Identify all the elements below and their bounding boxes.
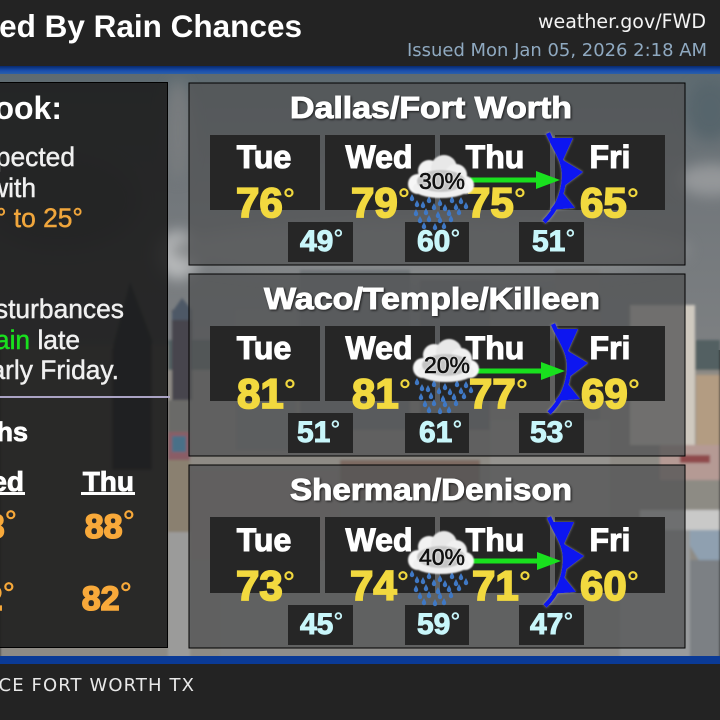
high temperatures: ° (514, 182, 526, 217)
day labels (237, 330, 630, 366)
low temperature boxes: 59 (417, 608, 450, 641)
panel: Waco/Temple/Killeen (189, 274, 685, 456)
front movement arrow (470, 552, 561, 570)
day labels: Wed (346, 139, 412, 175)
day labels: Tue (237, 330, 291, 366)
low temperature boxes: ° (450, 608, 460, 636)
panel: outlook (0, 82, 170, 648)
panel: Sherman/Denison (189, 465, 685, 648)
low temperature boxes: 45 (300, 608, 333, 641)
highs column: Thu (81, 466, 135, 618)
day labels: Wed (346, 330, 412, 366)
low temperature boxes: ° (333, 608, 343, 636)
low temperature boxes: 61 (419, 416, 452, 449)
icon: rain cloud 30% (408, 155, 474, 230)
highs column: Wed: ° (3, 576, 15, 611)
day labels: Thu (466, 522, 524, 558)
day labels (237, 522, 630, 558)
high temperatures: 73 (236, 562, 283, 609)
website link: weather.gov/FWD (538, 10, 706, 33)
high temperatures: 81 (237, 370, 284, 417)
day labels: Fri (590, 139, 630, 175)
low temperature boxes: 60 (417, 225, 450, 258)
highs column: Thu: 82 (82, 580, 120, 618)
high temperatures (236, 179, 639, 226)
day cards (210, 135, 665, 210)
day labels: Thu (466, 139, 524, 175)
day labels (237, 139, 630, 175)
day labels: Thu (466, 330, 524, 366)
highs column: Thu: Thu (83, 466, 134, 497)
high temperatures: ° (283, 182, 295, 217)
low temperature boxes: ° (333, 225, 343, 253)
high temperatures: 75 (467, 179, 514, 226)
cold front (544, 133, 583, 222)
high temperatures: 79 (351, 179, 398, 226)
low temperature boxes (288, 413, 584, 453)
low temperature boxes: 51 (532, 225, 565, 258)
footer blue band (0, 656, 720, 664)
header blue band (0, 66, 720, 74)
low temperature boxes: 53 (530, 416, 563, 449)
outlook text: rain (0, 294, 124, 385)
high temperatures: ° (628, 373, 640, 408)
high temperatures: 76 (236, 179, 283, 226)
high temperatures (236, 562, 639, 609)
low temperature boxes: ° (563, 416, 573, 444)
cold front (549, 324, 588, 413)
day labels: Tue (237, 139, 291, 175)
issued timestamp: Issued Mon Jan 05, 2026 2:18 AM (407, 40, 707, 61)
high temperatures: 71 (472, 562, 519, 609)
day labels: Wed (346, 522, 412, 558)
day cards (210, 326, 665, 401)
day labels: Tue (237, 522, 291, 558)
icon: rain cloud 20% (413, 339, 479, 414)
highs column: Wed: ° (5, 504, 17, 539)
heading: Waco/Temple/Killeen (264, 281, 600, 316)
low temperature boxes: ° (452, 416, 462, 444)
high temperatures: ° (516, 373, 528, 408)
high temperatures: 81 (352, 370, 399, 417)
front movement arrow (470, 171, 560, 189)
low temperature boxes: 47 (530, 608, 563, 641)
highs column: Wed (0, 466, 25, 618)
day labels: Fri (590, 330, 630, 366)
highs column: Thu: ° (123, 504, 135, 539)
icon: rain cloud 40% (408, 531, 474, 606)
heading: Sherman/Denison (290, 472, 572, 507)
high temperatures: 77 (469, 370, 516, 417)
icon: rain cloud 30%: 30% (419, 168, 465, 194)
low temperature boxes: 51 (297, 416, 330, 449)
footer bar (0, 664, 720, 720)
high temperatures: ° (284, 373, 296, 408)
heading: Dallas/Fort Worth (290, 90, 572, 125)
highs column: Thu: ° (120, 576, 132, 611)
low temperature boxes: ° (450, 225, 460, 253)
highs column: Thu: 88 (85, 508, 123, 546)
low temperature boxes (288, 605, 584, 645)
divider (0, 396, 170, 398)
header bar (0, 0, 720, 66)
high temperatures: 74 (350, 562, 397, 609)
high temperatures: ° (397, 565, 409, 600)
high temperatures: 65 (580, 179, 627, 226)
low temperature boxes: ° (330, 416, 340, 444)
high temperatures: ° (399, 373, 411, 408)
low temperature boxes: ° (565, 225, 575, 253)
high temperatures: ° (627, 182, 639, 217)
high temperatures: ° (627, 565, 639, 600)
high temperatures: ° (519, 565, 531, 600)
day cards (210, 517, 665, 593)
high temperatures: ° (398, 182, 410, 217)
front movement arrow (470, 362, 565, 380)
high temperatures: 60 (580, 562, 627, 609)
day labels: Fri (590, 522, 630, 558)
icon: rain cloud 40%: 40% (419, 544, 465, 570)
high temperatures: 69 (581, 370, 628, 417)
icon: rain cloud 20%: 20% (424, 352, 470, 378)
cold front (545, 517, 584, 606)
low temperature boxes: ° (563, 608, 573, 636)
outlook text: warm-up (0, 142, 83, 233)
high temperatures: ° (283, 565, 295, 600)
low temperature boxes (288, 222, 584, 262)
panel: Dallas/Fort Worth (189, 83, 685, 265)
low temperature boxes: 49 (300, 225, 333, 258)
high temperatures (237, 370, 640, 417)
